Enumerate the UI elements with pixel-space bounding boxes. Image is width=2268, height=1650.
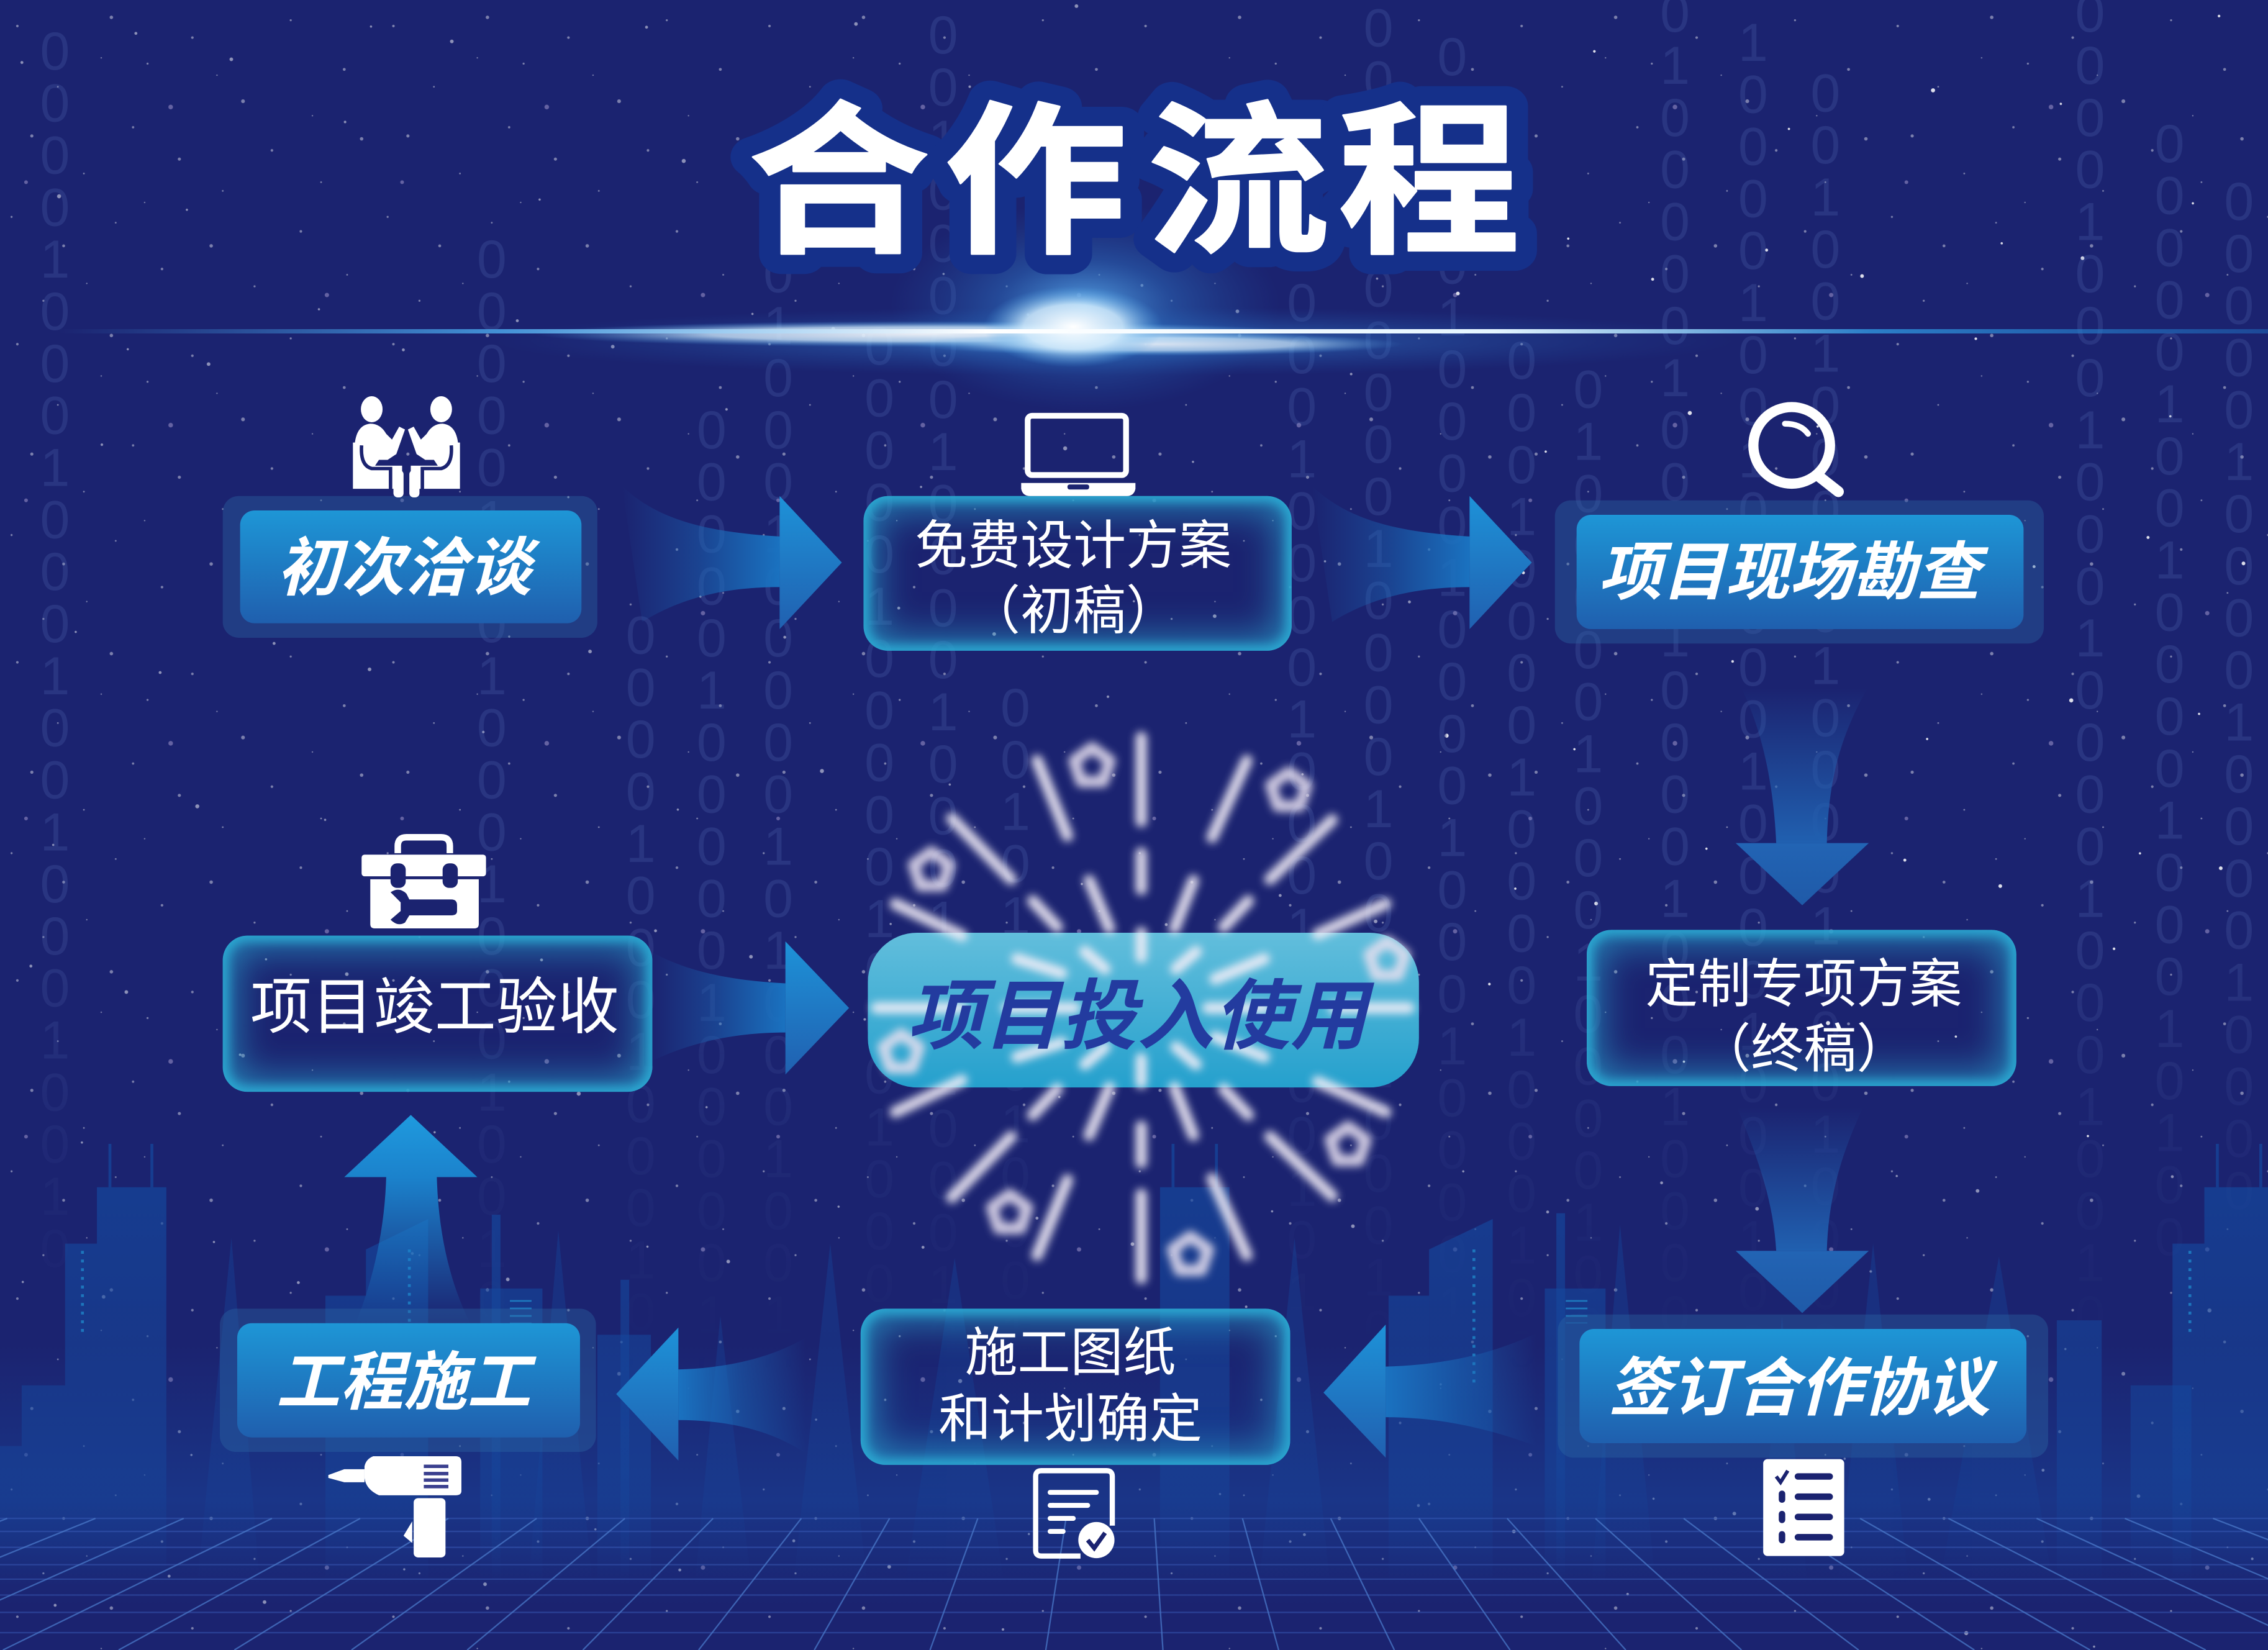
title: 程 [1338,91,1520,274]
panel: construction [220,1308,596,1452]
background binary digit columns: 00000100001000010000 [2224,172,2254,1220]
icon: document with check [1036,1471,1115,1558]
panel: site survey: 项目现场勘查 [1599,537,1989,608]
panel: construction: 工程施工 [276,1346,537,1418]
panel: completion acceptance [223,936,652,1092]
panel: completion acceptance: 项目竣工验收 [250,972,619,1041]
title: 作 [945,91,1127,274]
background binary digit columns [42,0,2252,1092]
background binary digit columns: 00100000100001000100100010 [928,6,958,1367]
panel: in use background [868,933,1419,1087]
panel: custom plan: 定制专项方案 [1645,955,1962,1014]
panel: free design plan: （初稿） [968,582,1179,641]
icon: two people talking [353,396,460,497]
background binary digit columns: 00010000100010000101 [1287,273,1317,1321]
background binary digit columns: 00010000001000010000100010 [1364,0,1394,1359]
panel: drawings and schedule [861,1308,1290,1465]
panel: free design plan [863,496,1292,651]
background binary digit columns: 000010001000100100010010 [40,22,70,1279]
icon: checklist [1763,1459,1844,1556]
panel: sign agreement [1558,1315,2048,1457]
arrow: drawings to construction [616,1328,805,1461]
panel: first talk: 初次洽谈 [277,532,540,604]
background binary digit columns: 000001000001000100001 [864,317,894,1417]
title: 合 [748,91,930,274]
title: 流 [1147,91,1329,274]
panel: custom plan: （终稿） [1698,1020,1909,1079]
panel text: project in use: 项目投入使用 [907,974,1375,1059]
title: 流 [1147,91,1329,274]
panel: free design plan: 免费设计方案 [915,517,1232,576]
panel: sign agreement: 签订合作协议 [1608,1352,1998,1423]
panel: drawings and schedule: 施工图纸 [964,1324,1176,1383]
arrow: free design to site survey [1312,486,1531,629]
arrow: acceptance to in use [651,941,849,1074]
background binary digit columns: 0010010000010000100010000 [1810,63,1840,1372]
background binary digit columns: 00001000100010001 [626,606,656,1498]
background binary digit columns: 00000100000100000100 [697,401,727,1449]
panel: drawings and schedule: 和计划确定 [938,1390,1202,1449]
background binary digit columns: 00000100001000010001000010 [1437,27,1467,1389]
background binary digit columns: 10000100100000100001000100 [1738,13,1768,1374]
icon: drill [329,1456,461,1557]
icon: laptop [1021,415,1135,496]
arrow: custom plan to sign agreement [1736,1108,1869,1313]
panel: first talk [223,496,597,638]
background binary digit columns: 00001000100010000100010010 [2075,0,2105,1345]
background binary digit columns: 01000001000010000100010000 [1660,0,1690,1345]
panel: site survey [1555,501,2044,643]
background binary digit columns: 00101000100010010 [1000,678,1030,1571]
icon: toolbox [361,837,486,928]
arrow: sign agreement to drawings [1323,1325,1536,1457]
background binary digit columns: 0100000100010000100 [1573,360,1603,1356]
background binary digit columns: 00010000100001000100 [1507,331,1536,1380]
arrow: site survey to custom plan [1736,688,1869,905]
arrow: construction to acceptance [344,1115,478,1323]
background binary digit columns: 0000010010000100010100 [2155,114,2185,1267]
panel: custom plan [1587,930,2016,1086]
arrow: first talk to free design [622,486,842,629]
title: 作 [945,91,1127,274]
background binary digit columns: 00000110100010001001010 [477,230,507,1435]
background binary digit columns: 01000100000101000100100 [763,245,793,1449]
title: 程 [1338,91,1520,274]
title: 合 [748,91,930,274]
icon: magnifier [1753,407,1838,492]
